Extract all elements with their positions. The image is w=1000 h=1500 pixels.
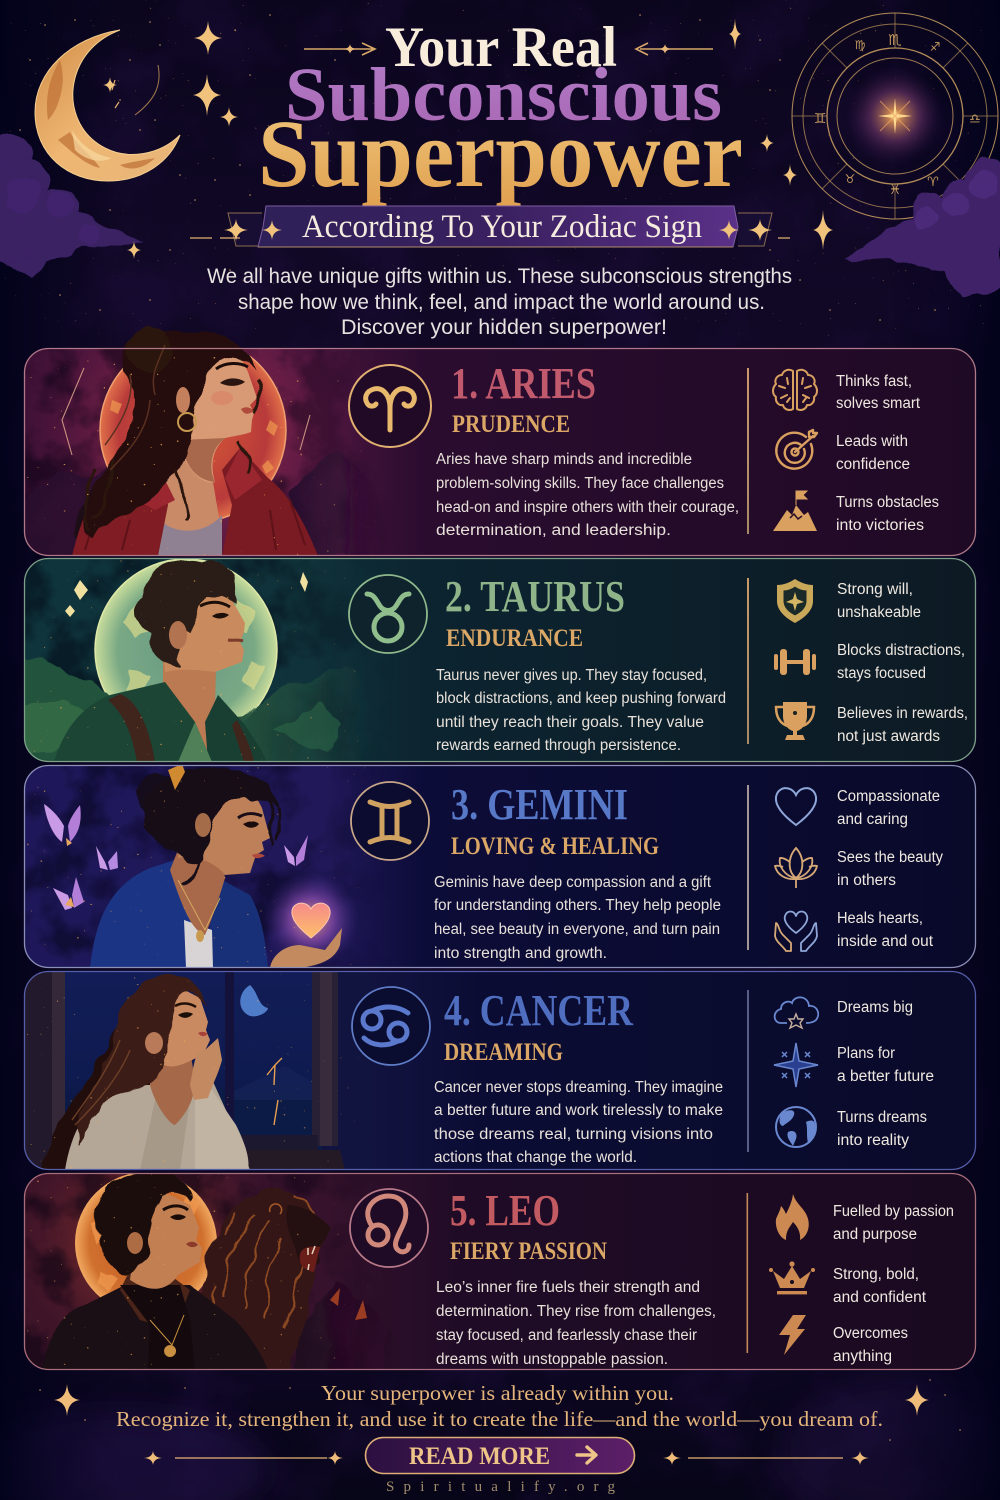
icon: crescent moon [35,30,180,181]
text: blocks distractions: stays focused [837,665,926,682]
zodiac wheel: ♏ [888,31,902,49]
text: heals hearts: Heals hearts, [837,910,923,927]
illustration: gemini woman [24,764,404,968]
title: Subconscious [285,53,722,137]
body text: leo: determination. They rise from challenges, [436,1303,716,1320]
icon: heart [776,788,816,825]
text: heals hearts: inside and out [837,933,934,950]
text: leads: confidence [836,456,910,473]
heading: cancer: 4. CANCER [444,986,634,1035]
text: believes: not just awards [837,728,940,745]
text: fuelled: Fuelled by passion [833,1203,954,1220]
text: compassionate: Compassionate [837,788,940,805]
icon: cloud star [775,997,818,1028]
body text: cancer: Cancer never stops dreaming. They imagine [434,1079,723,1096]
body text: cancer: actions that change the world. [434,1149,637,1166]
panel: taurus [14,558,976,775]
neck and face [178,352,257,483]
clouds right [845,156,1000,298]
body text: aries: Aries have sharp minds and incredible [436,451,692,468]
text: plans for: Plans for [837,1045,895,1062]
panel: cancer [24,971,976,1175]
text: turns dreams [837,1109,927,1149]
text: strong will: unshakeable [837,604,921,621]
icon: target [776,430,817,469]
website: Spiritualify.org [386,1479,616,1495]
body text: aries: determination, and leadership. [436,522,671,539]
text: blocks distractions [837,642,965,682]
icon: lotus [775,848,817,888]
title [258,16,743,207]
body text: taurus: block distractions, and keep pushing forward [436,690,726,707]
zodiac wheel: ♉ [845,172,855,186]
text: strong bold [833,1266,927,1306]
subheading: loving and healing: LOVING & HEALING [451,833,659,860]
body text: aries: problem-solving skills. They face challenges [436,475,724,492]
text: turns obstacles: Turns obstacles [836,494,939,511]
text: strong bold: and confident [833,1289,927,1306]
heading: gemini: 3. GEMINI [451,780,628,829]
icon: crown [769,1261,815,1294]
zodiac wheel: ♎ [969,112,981,127]
body text: leo [436,1279,716,1368]
body text: taurus [436,667,726,754]
text: sees the beauty [837,849,943,889]
icon: globe [776,1107,816,1147]
read more button [366,1438,634,1474]
text: overcomes: Overcomes [833,1325,908,1342]
read more button: READ MORE [409,1443,550,1470]
body text: cancer [434,1079,723,1166]
text: strong will: Strong will, [837,581,913,598]
body text: aries: head-on and inspire others with their courage, [436,499,739,516]
closing text [116,1381,883,1431]
text: sees the beauty: in others [837,872,896,889]
icon: brain [773,370,817,410]
body text: leo: stay focused, and fearlessly chase their [436,1327,697,1344]
zodiac wheel: ♓ [889,182,901,198]
sign icon: gemini [351,782,429,860]
sign icon: leo [350,1189,428,1267]
body text: cancer: those dreams real, turning visions into [434,1126,713,1143]
text: turns obstacles [836,494,939,534]
zodiac wheel: ♈ [927,175,939,190]
text: turns dreams: into reality [837,1132,909,1149]
body text: gemini: heal, see beauty in everyone, and turn pain [434,921,720,938]
icon: north star [774,1043,818,1087]
heading: aries: 1. ARIES [451,359,596,408]
zodiac wheel: ♊ [814,111,826,127]
text: leads: Leads with [836,433,908,450]
sign icon: taurus [349,575,427,653]
body text: taurus: rewards earned through persistence. [436,737,681,754]
intro text: We all have unique gifts within us. These subconscious strengths [207,265,792,288]
body text: leo: Leo’s inner fire fuels their strength and [436,1279,700,1296]
text: plans for: a better future [837,1068,934,1085]
closing text: Your superpower is already within you. [321,1381,674,1405]
text: dreams big: Dreams big [837,999,913,1016]
text: compassionate: and caring [837,811,908,828]
decorative line right [663,1451,869,1465]
subheading: prudence: PRUDENCE [452,411,570,438]
text: heals hearts [837,910,934,950]
intro text: shape how we think, feel, and impact the world around us. [238,291,765,314]
text: leads [836,433,910,473]
zodiac wheel: ♍ [855,38,865,52]
icon: healing hands [775,912,817,951]
arrow [577,1447,596,1463]
text: believes: Believes in rewards, [837,705,968,722]
text: turns dreams: Turns dreams [837,1109,927,1126]
sign icon: aries [349,365,431,447]
decorative arrows [304,43,713,55]
text: thinks fast: solves smart [836,395,921,412]
body text: gemini: into strength and growth. [434,945,607,962]
body text: gemini: for understanding others. They help people [434,897,721,914]
illustration: taurus man [24,559,372,762]
icon: shield [777,579,813,623]
body text: taurus: until they reach their goals. They value [436,714,704,731]
illustration: cancer woman [24,971,364,1175]
clouds left [0,134,143,280]
subtitle ribbon [190,206,790,247]
body text: gemini: Geminis have deep compassion and a gift [434,874,712,891]
text: overcomes [833,1325,908,1365]
icon: trophy [776,702,814,740]
heading: leo: 5. LEO [450,1186,560,1235]
subheading: fiery passion: FIERY PASSION [450,1238,607,1265]
subheading: endurance: ENDURANCE [446,625,583,652]
body text: aries [436,451,739,539]
icon: flame [776,1194,809,1240]
panel: leo [24,1172,976,1370]
panel: aries [24,326,976,556]
icon: dumbbell [774,649,816,675]
closing text: Recognize it, strengthen it, and use it to create the life—and the world—you dream of. [116,1407,883,1431]
text: compassionate [837,788,940,828]
text: fuelled: and purpose [833,1226,917,1243]
zodiac wheel: ♐ [930,40,940,54]
text: believes [837,705,968,745]
title: Superpower [258,100,743,207]
text: sees the beauty: Sees the beauty [837,849,943,866]
text: thinks fast: Thinks fast, [836,373,912,390]
icon: lightning bolt [779,1315,806,1355]
body text: gemini [434,874,721,962]
icon: mountain flag [773,491,817,531]
butterflies [44,804,308,910]
title: Your Real [385,16,617,79]
ribbon sparkles [224,219,772,241]
heading: taurus: 2. TAURUS [445,572,625,621]
text: turns obstacles: into victories [836,517,924,534]
illustration: leo man and lion [25,1174,374,1369]
text: plans for [837,1045,934,1085]
subheading: dreaming: DREAMING [444,1039,563,1066]
text: thinks fast [836,373,921,412]
zodiac wheel [792,13,998,219]
text: blocks distractions: Blocks distractions, [837,642,965,659]
sign icon: cancer [352,987,430,1065]
body text: cancer: a better future and work tirelessly to make [434,1102,723,1119]
subtitle ribbon: According To Your Zodiac Sign [302,209,702,245]
text: strong will [837,581,921,621]
sparkles footer [54,1384,929,1416]
text: overcomes: anything [833,1348,892,1365]
panel: gemini [24,764,976,968]
body text: taurus: Taurus never gives up. They stay focused, [436,667,707,684]
intro text: Discover your hidden superpower! [341,316,667,339]
sparkles header [103,18,833,259]
body text: leo: dreams with unstoppable passion. [436,1351,668,1368]
intro text [207,265,792,339]
text: fuelled [833,1203,954,1243]
illustration: aries woman [25,326,378,555]
decorative line left [144,1451,343,1465]
text: strong bold: Strong, bold, [833,1266,919,1283]
